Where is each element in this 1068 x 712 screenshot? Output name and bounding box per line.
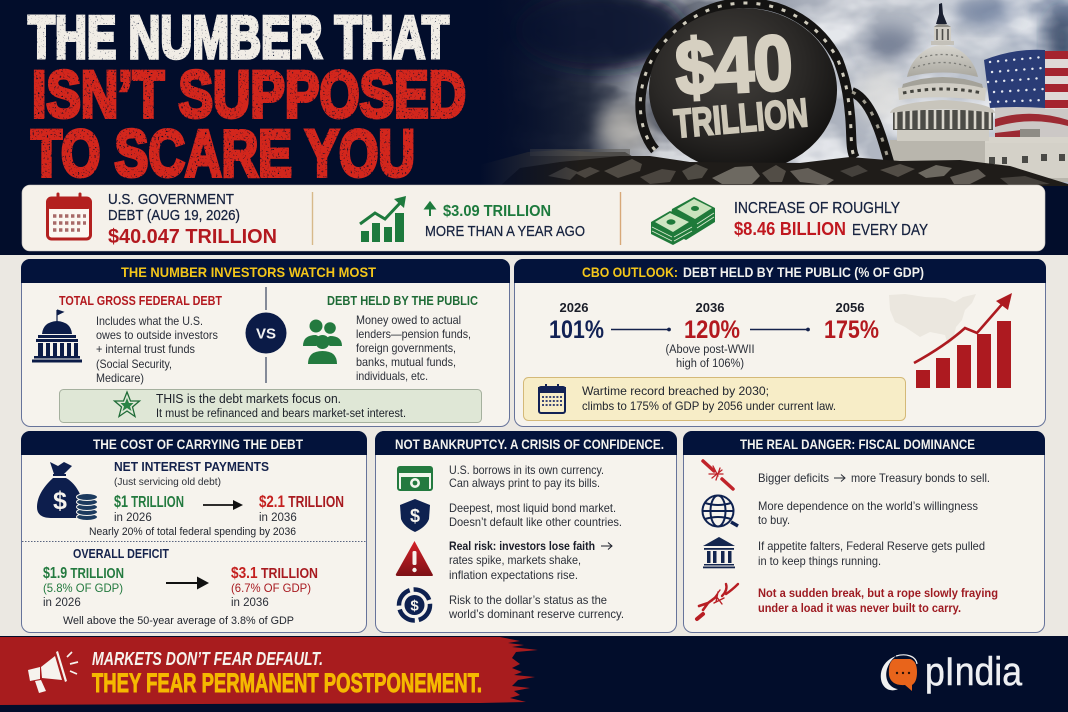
- panel: debt stats bar: [22, 185, 1045, 251]
- title: THE NUMBER THAT: [28, 4, 449, 71]
- subheading: total gross federal debt: TOTAL GROSS FEDERAL DEBT: [59, 293, 222, 308]
- text: gross debt description: Includes what the U.S.: [96, 314, 203, 328]
- text: dependence on the world: to buy.: [758, 513, 790, 527]
- icon: wrecking ball with $40 trillion: [649, 8, 837, 172]
- icon: navy calendar: [538, 384, 566, 413]
- text: gross debt description: + internal trust funds: [96, 342, 195, 356]
- daily increase text: INCREASE OF ROUGHLY: [734, 200, 900, 217]
- projection: 2036: [666, 300, 754, 370]
- projection: 2026: [549, 300, 604, 344]
- text: own currency: [449, 463, 604, 490]
- panel: the cost of carrying the debt: [21, 431, 367, 632]
- title: ISN’T SUPPOSED: [32, 57, 466, 131]
- icon: banknote: [398, 467, 432, 490]
- icon: circular dollar: $: [410, 598, 419, 614]
- overall deficit: $1.9 TRILLION: [43, 565, 124, 582]
- title: [28, 4, 466, 190]
- projection: 2036: 2036: [696, 300, 724, 315]
- net interest payments: $1 TRILLION: [114, 492, 184, 511]
- icon: money bag and coins: [37, 462, 98, 520]
- text: liquid bond market: Doesn’t default like other countries.: [449, 515, 622, 529]
- heading: THE COST OF CARRYING THE DEBT: [93, 437, 304, 452]
- projection: 2036: high of 106%): [676, 358, 744, 370]
- hero image: wrecking ball and Capitol: [480, 0, 1068, 186]
- year-on-year increase text: $3.09 TRILLION: [443, 203, 551, 220]
- footer message: MARKETS DON’T FEAR DEFAULT.: [92, 649, 323, 669]
- rubble: [480, 0, 1068, 186]
- heading: THE REAL DANGER: FISCAL DOMINANCE: [740, 436, 975, 452]
- icon: American flag: [984, 50, 1068, 140]
- heading: DEBT HELD BY THE PUBLIC (% OF GDP): [683, 264, 924, 280]
- projection: 2056: 175%: [824, 316, 879, 344]
- daily increase text: $8.46 BILLION: [734, 218, 846, 239]
- text: gross debt description: [96, 314, 218, 385]
- text: bigger deficits: [758, 471, 990, 485]
- heading: THE NUMBER INVESTORS WATCH MOST: [121, 264, 376, 280]
- footer message: THEY FEAR PERMANENT POSTPONEMENT.: [92, 668, 482, 698]
- overall deficit: $3.1 TRILLION: [231, 565, 318, 582]
- year-on-year increase text: MORE THAN A YEAR AGO: [425, 224, 585, 240]
- debt total text: U.S. GOVERNMENT: [108, 192, 234, 208]
- projection: 2026: 101%: [549, 316, 604, 344]
- callout: wartime record: climbs to 175% of GDP by 2056 under current law.: [582, 399, 836, 413]
- projection: 2056: [824, 300, 879, 344]
- projection: 2036: (Above post-WWII: [666, 344, 754, 356]
- text: bigger deficits: more Treasury bonds to sell.: [851, 471, 990, 485]
- title: TO SCARE YOU: [31, 116, 415, 190]
- text: own currency: Can always print to pay its bills.: [449, 476, 600, 490]
- text: federal reserve: If appetite falters, Federal Reserve gets pulled: [758, 539, 985, 553]
- callout: this is the debt markets focus on: THIS is the debt markets focus on.: [156, 392, 341, 406]
- debt total text: [108, 192, 277, 248]
- icon: stack of money: [651, 197, 715, 245]
- text: real risk: [449, 539, 612, 582]
- icon: people: [303, 320, 342, 364]
- year-on-year increase text: [425, 202, 585, 240]
- text: public debt description: individuals, etc.: [356, 369, 428, 383]
- logo: OpIndia: [881, 650, 1023, 694]
- debt total text: $40.047 TRILLION: [108, 225, 277, 248]
- net interest payments: in 2036: [259, 512, 297, 524]
- text: rope slowly fraying: Not a sudden break, but a rope slowly fraying: [758, 586, 998, 600]
- overall deficit: (5.8% OF GDP): [43, 581, 123, 595]
- icon: warning triangle: [396, 541, 433, 576]
- middle cream background: [0, 255, 1068, 636]
- text: reserve currency: Risk to the dollar’s status as the: [449, 593, 607, 607]
- heading: NOT BANKRUPTCY. A CRISIS OF CONFIDENCE.: [395, 436, 664, 452]
- projection: 2056: 2056: [836, 300, 864, 315]
- text: own currency: U.S. borrows in its own currency.: [449, 463, 604, 477]
- icon: globe with magnifier: [702, 496, 738, 526]
- projection: 2036: 120%: [684, 316, 740, 344]
- text: federal reserve: [758, 539, 985, 568]
- panel: not bankruptcy, a crisis of confidence: [375, 431, 677, 632]
- icon: faint US map: [889, 294, 976, 345]
- text: public debt description: [356, 313, 471, 383]
- text: public debt description: banks, mutual funds,: [356, 355, 456, 369]
- VS badge: VS: [256, 326, 276, 342]
- net interest payments: NET INTEREST PAYMENTS: [114, 459, 269, 474]
- text: gross debt description: (Social Security,: [96, 357, 172, 371]
- bar chart with rising arrow: [914, 293, 1012, 388]
- text: dependence on the world: More dependence on the world’s willingness: [758, 499, 978, 513]
- text: real risk: Real risk: investors lose faith: [449, 539, 595, 553]
- text: gross debt description: Medicare): [96, 371, 144, 385]
- icon: circular dollar: [399, 590, 430, 620]
- projection: 2026: 2026: [560, 300, 588, 315]
- text: public debt description: foreign governments,: [356, 341, 456, 355]
- logo: OpIndia: pIndia: [925, 650, 1023, 694]
- text: gross debt description: owes to outside investors: [96, 328, 218, 342]
- arrow: [611, 328, 671, 331]
- text: dependence on the world: [758, 499, 978, 527]
- panel: CBO outlook: [514, 259, 1046, 426]
- overall deficit: in 2026: [43, 597, 81, 609]
- icon: federal reserve bank: [703, 537, 735, 568]
- text: liquid bond market: [449, 501, 622, 529]
- icon: wrecking ball with $40 trillion: TRILLION: [672, 91, 810, 147]
- debt total text: DEBT (AUG 19, 2026): [108, 208, 240, 224]
- text: reserve currency: [448, 593, 624, 621]
- icon: calendar: [47, 194, 91, 239]
- text: public debt description: Money owed to actual: [356, 313, 461, 327]
- footer banner: [0, 637, 538, 705]
- subheading: debt held by the public: DEBT HELD BY THE PUBLIC: [327, 293, 479, 308]
- overall deficit: (6.7% OF GDP): [231, 581, 311, 595]
- daily increase text: EVERY DAY: [852, 222, 928, 239]
- net interest payments: [89, 459, 344, 538]
- callout: this is the debt markets focus on: It must be refinanced and bears market-set interest.: [156, 408, 406, 420]
- icon: frayed rope: [703, 461, 733, 489]
- text: liquid bond market: Deepest, most liquid bond market.: [449, 501, 616, 515]
- icon: Capitol building: [890, 3, 1068, 182]
- panel: the real danger, fiscal dominance: [683, 431, 1045, 632]
- text: real risk: rates spike, markets shake,: [449, 553, 581, 567]
- footer message: [92, 649, 482, 698]
- icon: megaphone: [28, 651, 78, 693]
- text: bigger deficits: Bigger deficits: [758, 471, 829, 485]
- icon: chain behind ball: [640, 3, 892, 172]
- callout: wartime record: Wartime record breached by 2030;: [582, 384, 769, 398]
- callout: this is the debt markets focus on: [60, 390, 482, 422]
- daily increase text: [734, 200, 928, 239]
- text: rope slowly fraying: [758, 586, 998, 615]
- net interest payments: Nearly 20% of total federal spending by 2036: [89, 526, 296, 538]
- overall deficit: OVERALL DEFICIT: [73, 547, 169, 561]
- text: public debt description: lenders—pension funds,: [356, 327, 471, 341]
- icon: rising green chart: [360, 196, 406, 242]
- icon: shield with dollar: $: [410, 506, 420, 526]
- panel: the number investors watch most: [21, 259, 510, 426]
- callout: wartime record: [524, 378, 906, 420]
- heading: [582, 264, 924, 280]
- icon: government building: [32, 310, 82, 362]
- overall deficit: Well above the 50-year average of 3.8% of GDP: [63, 615, 294, 627]
- text: real risk: inflation expectations rise.: [449, 568, 578, 582]
- icon: breaking rope: [697, 584, 738, 619]
- net interest payments: (Just servicing old debt): [114, 476, 221, 488]
- arrow: [750, 328, 810, 331]
- overall deficit: in 2036: [231, 597, 269, 609]
- net interest payments: $2.1 TRILLION: [259, 492, 344, 511]
- text: reserve currency: world’s dominant reserve currency.: [448, 607, 624, 621]
- VS badge: [246, 312, 286, 354]
- text: rope slowly fraying: under a load it was never built to carry.: [758, 601, 961, 615]
- icon: shield with dollar: [400, 499, 430, 532]
- text: federal reserve: in to keep things running.: [758, 554, 881, 568]
- heading: CBO OUTLOOK:: [582, 264, 678, 280]
- overall deficit: [43, 547, 318, 627]
- icon: money bag and coins: $: [53, 487, 67, 515]
- icon: wrecking ball with $40 trillion: $40: [673, 18, 795, 112]
- net interest payments: in 2026: [114, 512, 152, 524]
